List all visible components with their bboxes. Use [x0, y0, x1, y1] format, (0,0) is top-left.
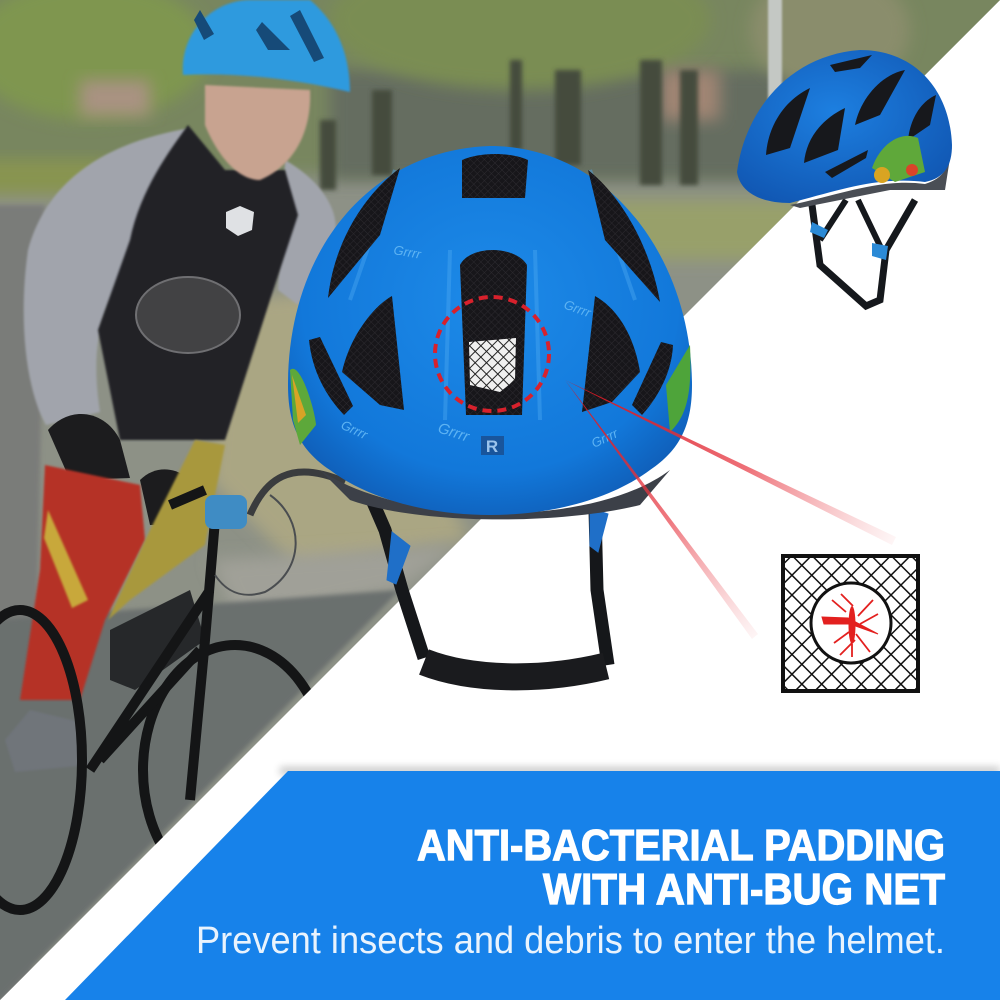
Grrrr sticker text: Grrrr: [339, 417, 371, 443]
blue banner: [65, 771, 1000, 1000]
green car sticker: [872, 136, 925, 182]
heading: ANTI-BACTERIAL PADDING: [417, 821, 945, 870]
rider sleeves: [24, 128, 336, 425]
main helmet: [288, 146, 692, 519]
shadow above the banner: [280, 767, 1000, 775]
rider shoe: [6, 711, 77, 772]
straps of main helmet: [372, 500, 608, 677]
straps: [812, 200, 915, 306]
shell highlight ribs: [350, 170, 635, 420]
Grrrr sticker text: Grrrr: [562, 297, 594, 320]
jersey logo: [136, 277, 240, 353]
Grrrr sticker text: Grrrr: [392, 242, 423, 262]
rider trousers: [20, 465, 145, 700]
rider jersey: [98, 125, 298, 440]
shell: [737, 50, 952, 203]
icon: mosquito: [822, 594, 878, 657]
small collar badge: [226, 206, 254, 236]
bicycle frame: [90, 490, 215, 800]
shell underside: [320, 470, 670, 519]
vents: [309, 154, 673, 415]
logo: R: [486, 437, 498, 456]
handlebar: [250, 472, 345, 515]
vents: [766, 55, 936, 178]
shell underside: [790, 145, 952, 208]
small helmet, top right: [737, 50, 952, 306]
anti-bug net patch: [469, 338, 516, 392]
rider face: [205, 85, 310, 180]
anti-bug net icon: [783, 556, 918, 691]
chin pad: [424, 662, 606, 677]
blue buckles: [387, 532, 410, 584]
Grrrr sticker text: Grrrr: [589, 425, 621, 451]
Grrrr sticker text: [339, 242, 621, 451]
dashed red highlight circle: [435, 297, 549, 411]
logo: [481, 436, 504, 456]
bicycle rear wheel: [0, 610, 82, 910]
blue grip: [205, 495, 247, 529]
subheading: Prevent insects and debris to enter the helmet.: [196, 920, 945, 962]
bicycle: [0, 472, 345, 910]
green car stickers: [290, 369, 316, 445]
rider helmet: [183, 0, 350, 92]
heading: [417, 821, 945, 914]
heading: WITH ANTI-BUG NET: [543, 865, 945, 914]
shell: [288, 146, 692, 515]
red pointer beams: [565, 380, 896, 639]
second leg: [110, 590, 205, 690]
rider gloves: [48, 414, 130, 480]
rider: [5, 0, 350, 772]
brake cable: [215, 495, 296, 595]
Grrrr sticker text: Grrrr: [436, 420, 472, 446]
bicycle front wheel: [138, 640, 311, 844]
